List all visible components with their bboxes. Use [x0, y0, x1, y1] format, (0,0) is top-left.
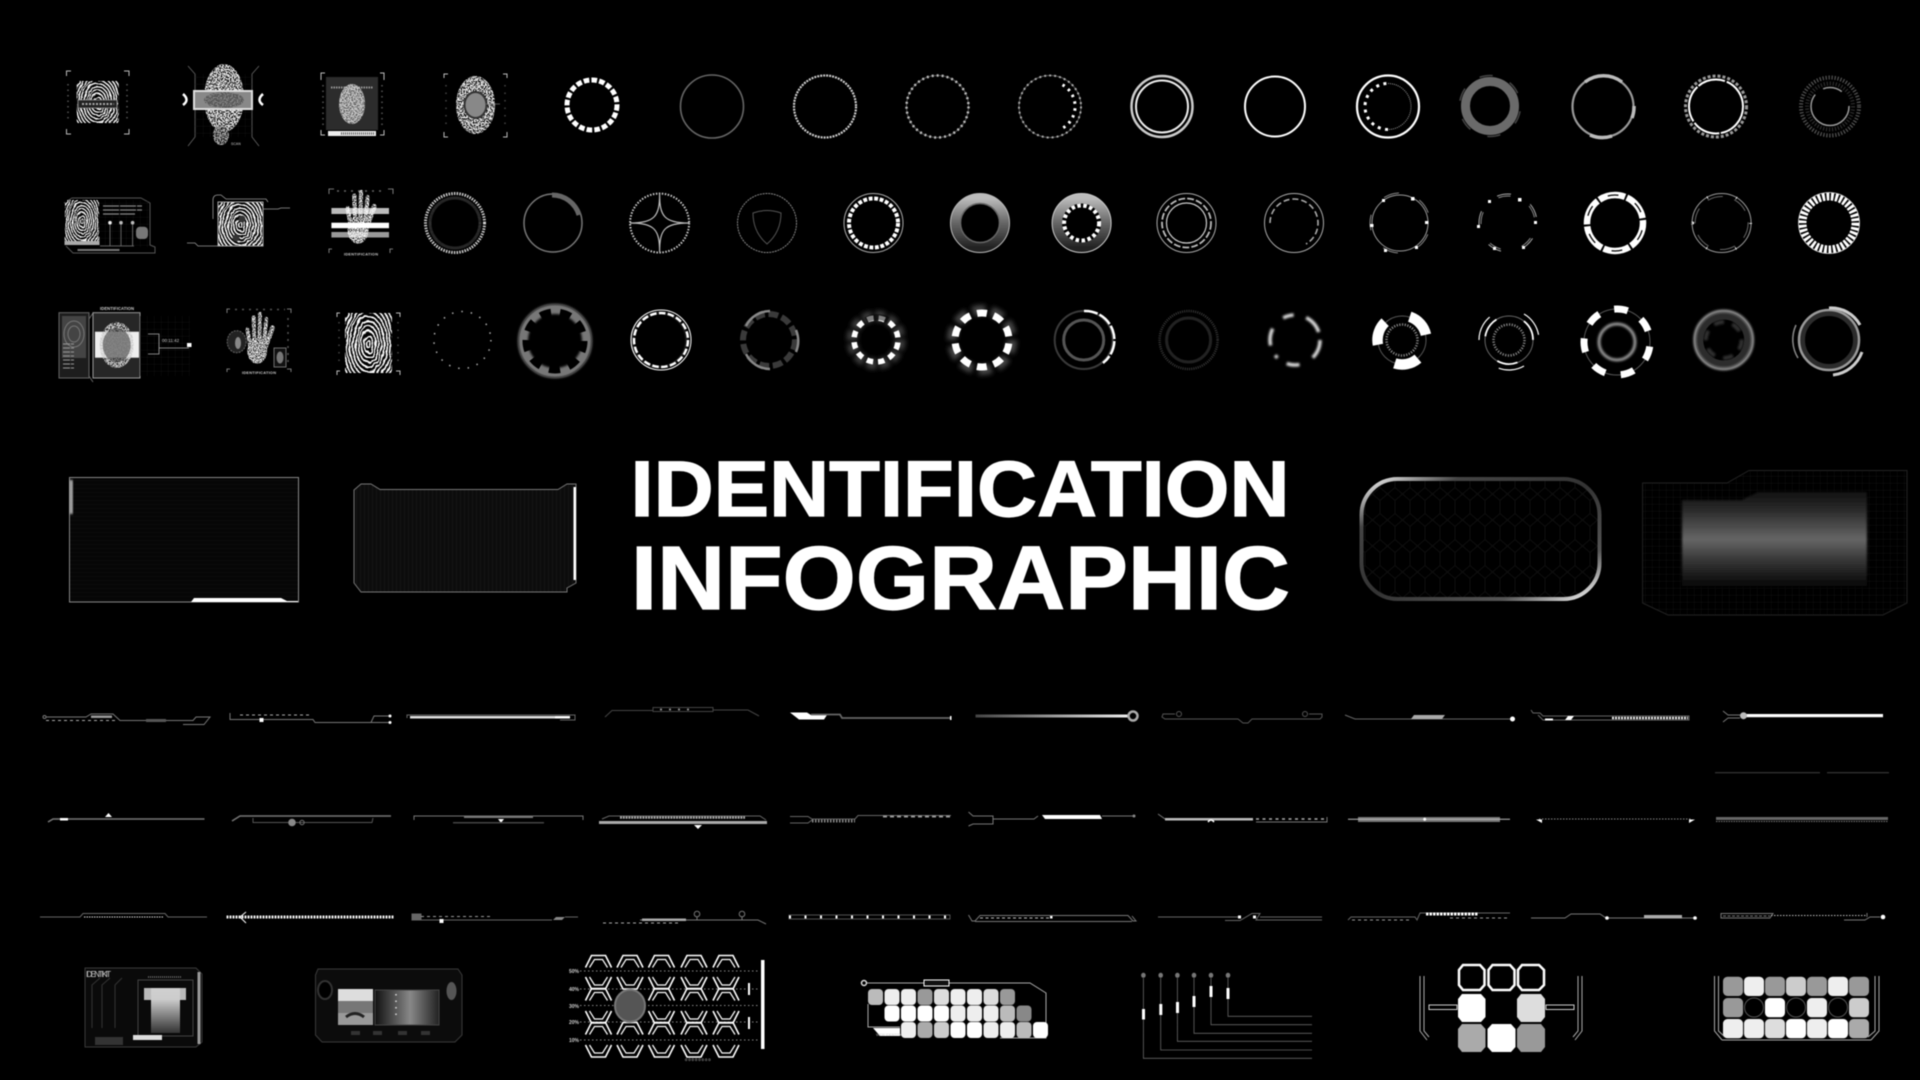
- divider 28: [1348, 913, 1510, 920]
- ring: dotted: [794, 76, 856, 138]
- ring: thin dim dashes: [1264, 194, 1324, 252]
- ring: big outer dashes with glowing inner ring: [1580, 305, 1654, 379]
- ring: dark with white arc: [1055, 311, 1114, 369]
- ring: three outlined arcs: [1468, 299, 1550, 381]
- data card with fingerprint: [62, 189, 155, 253]
- divider 27: [1158, 914, 1322, 920]
- large fingerprint identification panel: 00:11:42: [162, 338, 180, 343]
- ring: thin with top arc: [524, 194, 582, 252]
- divider 16: [968, 812, 1136, 826]
- ring: heavy white segmented: [1581, 189, 1649, 257]
- widget: hexagon chart: 20%: [569, 1020, 580, 1026]
- title: IDENTIFICATION: [630, 444, 1290, 533]
- widget: face scanner panel: [316, 969, 462, 1042]
- divider 9: [1531, 710, 1689, 720]
- fingerprint widget 3: [321, 73, 384, 136]
- ring: thin segmented: [1692, 194, 1751, 252]
- ring: dashed double: [906, 76, 968, 138]
- widget: Identikit panel: [85, 968, 202, 1047]
- divider 30: [1721, 913, 1885, 920]
- panel: folder frame with gradient: [1643, 470, 1907, 615]
- circular HUD elements row 3: [434, 299, 1862, 381]
- divider 21: [40, 914, 207, 917]
- divider 24: [603, 911, 766, 924]
- ring: white dashed band: [631, 310, 691, 370]
- ring: dotted and white: [1686, 76, 1746, 137]
- widget: octagon grid: [1420, 965, 1582, 1052]
- divider 3: [407, 715, 575, 720]
- widget: hexagon chart: 50%: [569, 969, 580, 975]
- ring: chrome with outer arcs: [1793, 308, 1862, 375]
- title: INFOGRAPHIC: [631, 529, 1290, 629]
- ring: broken with nodes: [1467, 182, 1549, 264]
- divider 23: [412, 914, 578, 923]
- ring: three white wedges: [1371, 309, 1433, 371]
- divider 17: [1158, 814, 1327, 822]
- line set: divider row 3: [40, 911, 1885, 924]
- ring: triple thin: [1157, 194, 1216, 252]
- fingerprint widget 4: [444, 74, 507, 137]
- divider 13: [414, 816, 583, 823]
- divider 10: [1723, 711, 1883, 722]
- widget: circuit traces: [1141, 973, 1312, 1058]
- ring: chrome bubble: [1695, 311, 1753, 369]
- ring: thick grey with outer arcs: [1455, 71, 1525, 141]
- large fingerprint identification panel: [59, 306, 192, 382]
- widget: hexagon chart: 0 0 0 0 0 0 0 0: [685, 1057, 711, 1062]
- widget: hexagon chart: 30%: [569, 1004, 580, 1010]
- divider 15: [790, 816, 951, 823]
- fingerprint widget 2: SCAN: [231, 142, 241, 146]
- ring: double white: [1132, 76, 1192, 137]
- ring: gear: [518, 304, 592, 378]
- fingerprint widget 1: [66, 70, 129, 136]
- divider 7: [1162, 712, 1322, 723]
- ring: dashed thick: [844, 194, 903, 252]
- divider 14: [599, 816, 767, 829]
- widget: Identikit panel: IDENTIKIT: [86, 970, 111, 979]
- panel: notched frame with white side bar: [354, 484, 576, 592]
- divider extra: [1715, 772, 1889, 774]
- ring: shield: [738, 194, 796, 252]
- hand print widget: [227, 309, 291, 375]
- ring: grey with thick arcs: [1572, 76, 1634, 138]
- widget: hexagon chart: 40%: [569, 987, 580, 993]
- divider 19: [1536, 819, 1695, 823]
- ring: glowing dashes large: [952, 310, 1012, 370]
- ring: metallic with teeth: [1052, 194, 1111, 252]
- hand scanner widget: [329, 189, 393, 256]
- fingerprint with circuit lines: [187, 191, 290, 259]
- hand scanner widget: IDENTIFICATION: [344, 252, 378, 256]
- circular HUD elements row 1: [567, 71, 1859, 141]
- title: [630, 444, 1290, 629]
- hand print widget: IDENTIFICATION: [242, 370, 276, 375]
- ring: white with inner dots: [1357, 76, 1419, 138]
- line set: divider row 1: [43, 708, 1889, 773]
- ring: ticked: [426, 194, 484, 252]
- fingerprint widgets row 3: [59, 297, 400, 391]
- widget: honeycomb keypad: [1714, 976, 1879, 1040]
- ring: thin grey: [680, 75, 744, 138]
- divider 2: [230, 713, 392, 724]
- large fingerprint identification panel: IDENTIFICATION: [100, 306, 134, 311]
- divider 11: [48, 813, 204, 822]
- ring: glowing dashes small: [851, 315, 901, 365]
- panel: rectangular frame with white foot: [70, 478, 298, 602]
- widget: hexagon chart: 10%: [569, 1038, 580, 1044]
- widget: keypad grid: VIEW IDENTITY: [876, 1033, 903, 1037]
- divider 29: [1531, 914, 1697, 920]
- divider 4: [605, 708, 759, 717]
- divider 1: [43, 714, 210, 724]
- fingerprint widgets row 2: [62, 189, 393, 259]
- divider 22: [226, 912, 394, 923]
- divider 6: [976, 712, 1138, 720]
- divider 8: [1345, 715, 1515, 722]
- divider 5: [790, 712, 952, 720]
- ring: broken glowing arcs: [1270, 315, 1320, 365]
- circular HUD elements row 2: [426, 181, 1860, 265]
- ring: dark tech: [1801, 78, 1859, 136]
- ring: dotted with right arc ticks: [1019, 76, 1081, 138]
- line set: divider row 2: [48, 812, 1888, 829]
- ring: sparse dots: [434, 312, 491, 368]
- ring: white line: [1245, 76, 1305, 136]
- divider 26: [968, 915, 1136, 922]
- panel: rounded chrome frame with hexagon mesh: [1362, 479, 1600, 599]
- divider 25: [789, 915, 950, 919]
- divider 20: [1716, 817, 1888, 822]
- ring: white ticked: [1798, 192, 1860, 254]
- fingerprint widgets row 1: [66, 64, 507, 146]
- ring: star compass: [630, 194, 689, 252]
- widget: hexagon chart: [569, 956, 764, 1062]
- fingerprint square widget: [337, 297, 400, 391]
- divider 12: [232, 816, 391, 826]
- ring: white dashed: [567, 80, 617, 130]
- ring: five nodes: [1358, 181, 1442, 265]
- ring: dim gear segments: [743, 311, 798, 369]
- fingerprint widget 2: [183, 64, 263, 146]
- ring: dim tech: [1160, 311, 1218, 369]
- ring: metallic: [950, 194, 1010, 252]
- divider 18: [1348, 817, 1510, 822]
- widget: keypad grid: [862, 980, 1048, 1038]
